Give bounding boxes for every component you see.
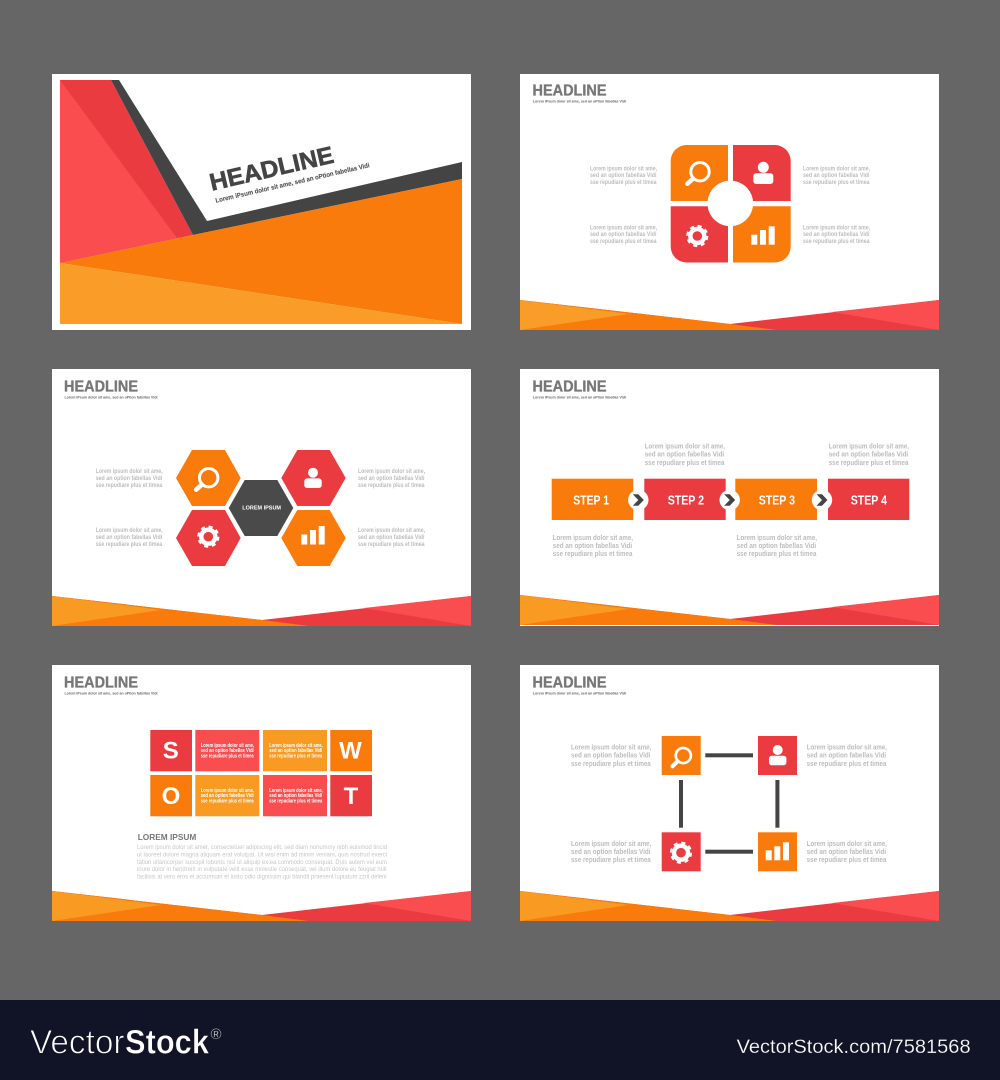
icon: gear [688,226,707,246]
quadrant top left [671,145,728,201]
text bottom left [590,224,657,245]
text bottom right: Lorem ipsum dolor sit ame, [803,224,870,231]
S description: Lorem ipsum dolor sit ame, [201,743,255,749]
T description: sed an option fabellas Vidi [269,793,323,799]
logo wordmark [30,1024,222,1062]
letter T: T [344,783,359,810]
logo wordmark: Stock [125,1024,209,1062]
text top left: sed an option fabellas Vidi [571,751,650,760]
O description: sse repudiare plus et timea [201,798,254,804]
square bottom left [662,832,701,871]
footer ribbon [520,891,939,921]
text above step 4: sse repudiare plus et timea [829,458,909,467]
centre label: LOREM IPSUM [242,506,281,512]
cover light orange shape [60,263,462,324]
text bottom right [803,224,870,245]
text top left: Lorem ipsum dolor sit ame, [96,468,163,475]
text above step 2 [645,442,725,467]
paragraph [137,844,387,881]
square bottom right [758,832,797,871]
square top left [662,736,701,775]
footer ribbon [520,300,939,330]
slide 3: hexagon diagram [52,369,471,626]
connector lines [679,753,779,854]
T description [269,788,323,804]
text above step 2: Lorem ipsum dolor sit ame, [645,442,725,450]
paragraph: Lorem ipsum dolor sit amet, consectetuer adipiscing elit, sed diam nonummy nibh euismod tincid [137,844,387,851]
T description: sse repudiare plus et timea [269,798,322,804]
text top left: Lorem ipsum dolor sit ame, [571,742,651,752]
letter W: W [339,738,362,764]
logo wordmark: Vector [30,1024,124,1062]
text bottom left: Lorem ipsum dolor sit ame, [96,527,163,534]
icon: person [753,162,773,184]
slide 1: cover [52,74,471,330]
heading: HEADLINE [532,674,606,692]
quadrant top right [733,145,791,201]
text top right: sed an option fabellas Vidi [807,751,886,760]
subheading: Lorem iPsum dolor sit ame, sed an oPtion fabellas Vidi [64,394,158,400]
text bottom right: sed an option fabellas Vidi [358,534,425,541]
step 4 box [828,479,909,520]
icon: person [769,745,786,765]
cover red shape [60,80,193,263]
image id: VectorStock.com/7581568 [737,1036,971,1058]
subheading: Lorem iPsum dolor sit ame, sed an oPtion fabellas Vidi [64,690,158,696]
footer ribbon [52,596,471,626]
text top left: sse repudiare plus et timea [571,759,652,768]
text top left [590,165,657,186]
text bottom right: Lorem ipsum dolor sit ame, [807,839,887,848]
icon: gear [671,843,691,862]
text top right: Lorem ipsum dolor sit ame, [807,742,887,752]
text top left: Lorem ipsum dolor sit ame, [590,165,657,172]
subheading: Lorem iPsum dolor sit ame, sed an oPtion fabellas Vidi [533,98,626,104]
text below step 1 [553,533,633,558]
hexagon bottom left [176,510,241,566]
step 1 label: STEP 1 [573,493,609,507]
W description: Lorem ipsum dolor sit ame, [269,743,323,749]
text bottom right: sed an option fabellas Vidi [803,231,870,238]
text bottom left: sed an option fabellas Vidi [96,534,162,541]
hexagon bottom right [281,510,346,566]
text bottom left: Lorem ipsum dolor sit ame, [571,839,651,848]
T text tile [263,775,327,816]
paragraph: tation ullamcorper suscipit lobortis nisl ut aliquip ex ea commodo consequat. Duis autem vel eum [137,859,387,866]
text above step 4: sed an option fabellas Vidi [829,450,908,459]
text top left: sse repudiare plus et timea [590,179,657,186]
text bottom right: sse repudiare plus et timea [807,855,887,864]
heading: HEADLINE [532,378,606,396]
arrow 2 [720,490,740,510]
S tile [150,730,192,771]
S description: sed an option fabellas Vidi [201,748,254,754]
text bottom right: sse repudiare plus et timea [358,541,425,548]
icon: person [304,468,322,488]
heading: HEADLINE [64,378,138,396]
text bottom left [96,527,163,548]
text bottom right [807,839,887,864]
text bottom left: sed an option fabellas Vidi [571,847,650,856]
cover subtitle: Lorem iPsum dolor sit ame, sed an oPtion fabellas Vidi [215,162,371,205]
icon: magnifier [672,748,691,766]
text top right: Lorem ipsum dolor sit ame, [358,468,425,475]
footer ribbon [52,891,471,921]
O description: Lorem ipsum dolor sit ame, [201,788,255,794]
text below step 3: Lorem ipsum dolor sit ame, [737,533,817,542]
slide 2: quadrant diagram [520,74,939,330]
cover headline: HEADLINE [207,142,336,197]
text below step 1: Lorem ipsum dolor sit ame, [553,533,633,542]
text bottom right: Lorem ipsum dolor sit ame, [358,527,425,534]
W description [269,743,323,760]
paragraph: facilisis at vero eros et accumsan et iusto odio dignissim qui blandit praesent luptatum zzril deleni [137,874,387,881]
S text tile [195,730,259,771]
text top right: sed an option fabellas Vidi [358,475,425,482]
step 1 box [552,479,633,520]
text top right: sed an option fabellas Vidi [803,172,870,179]
text above step 2: sed an option fabellas Vidi [645,450,724,459]
text bottom left: sed an option fabellas Vidi [590,231,657,238]
subheading: Lorem iPsum dolor sit ame, sed an oPtion fabellas Vidi [533,394,626,400]
watermark bar [0,1000,1000,1080]
O description: sed an option fabellas Vidi [201,793,254,799]
square top right [758,736,797,775]
letter O: O [162,783,180,810]
centre circle [708,181,753,226]
text below step 1: sse repudiare plus et timea [553,549,633,558]
text top right: sse repudiare plus et timea [803,179,870,186]
T tile [330,775,372,816]
section heading: LOREM IPSUM [138,832,196,842]
heading: HEADLINE [532,82,606,100]
cover light red shape [60,80,177,263]
O text tile [195,775,259,816]
text top right [358,468,425,489]
letter S: S [163,738,179,764]
text bottom left: sse repudiare plus et timea [571,855,652,864]
W description: sed an option fabellas Vidi [269,748,323,754]
step 4 label: STEP 4 [851,493,887,507]
text above step 4: Lorem ipsum dolor sit ame, [829,442,909,450]
text above step 2: sse repudiare plus et timea [645,458,725,467]
O tile [150,775,192,816]
S description: sse repudiare plus et timea [201,754,254,760]
logo wordmark: ® [210,1026,222,1043]
W tile [330,730,372,771]
S description [201,743,255,760]
paragraph: iriure dolor in hendrerit in vulputate velit esse molestie consequat, vel illum dolore eu feugiat null [137,866,387,873]
icon: magnifier [196,468,218,490]
step 3 label: STEP 3 [759,493,795,507]
text bottom right: sse repudiare plus et timea [803,238,870,245]
T description: Lorem ipsum dolor sit ame, [269,788,323,794]
text bottom left [571,839,652,864]
step 2 box [644,479,726,520]
text bottom left: sse repudiare plus et timea [590,238,657,245]
step 2 label: STEP 2 [668,493,704,507]
text below step 1: sed an option fabellas Vidi [553,541,632,550]
text top left: sed an option fabellas Vidi [590,172,657,179]
O description [201,788,255,804]
cover orange shape [60,179,462,324]
text bottom right [358,527,425,548]
text bottom right: sed an option fabellas Vidi [807,847,886,856]
subheading: Lorem iPsum dolor sit ame, sed an oPtion fabellas Vidi [533,690,626,696]
icon: magnifier [688,162,709,184]
text top left: sed an option fabellas Vidi [96,475,162,482]
slide 6: connected squares [520,665,939,921]
icon: bars [751,226,775,245]
text below step 3: sed an option fabellas Vidi [737,541,816,550]
paragraph: ut laoreet dolore magna aliquam erat volutpat. Ut wisi enim ad minim veniam, quis nostrud exerci [137,852,387,858]
icon: gear [199,527,218,546]
text top right: sse repudiare plus et timea [807,759,887,768]
hexagon top right [281,450,346,506]
text top right: Lorem ipsum dolor sit ame, [803,165,870,172]
text top left [96,468,163,489]
quadrant bottom right [733,206,791,262]
text top left: sse repudiare plus et timea [96,482,163,489]
text bottom left: sse repudiare plus et timea [96,541,163,548]
hexagon centre [229,480,293,536]
slide 5: SWOT [52,665,471,921]
text below step 3: sse repudiare plus et timea [737,549,817,558]
icon: bars [766,842,789,860]
W description: sse repudiare plus et timea [269,754,322,760]
cover dark band [111,80,462,235]
footer ribbon [520,595,939,625]
arrow 3 [812,490,832,510]
arrow 1 [628,490,648,510]
step 3 box [735,479,817,520]
text bottom left: Lorem ipsum dolor sit ame, [590,224,657,231]
quadrant bottom left [671,206,728,262]
hexagon top left [176,450,241,506]
text top right: sse repudiare plus et timea [358,482,425,489]
text top right [803,165,870,186]
W text tile [263,730,327,771]
text above step 4 [829,442,909,467]
icon: bars [301,526,325,544]
text below step 3 [737,533,817,558]
text top left [571,742,652,768]
slide 4: steps process [520,369,939,626]
heading: HEADLINE [64,674,138,692]
text top right [807,742,887,768]
